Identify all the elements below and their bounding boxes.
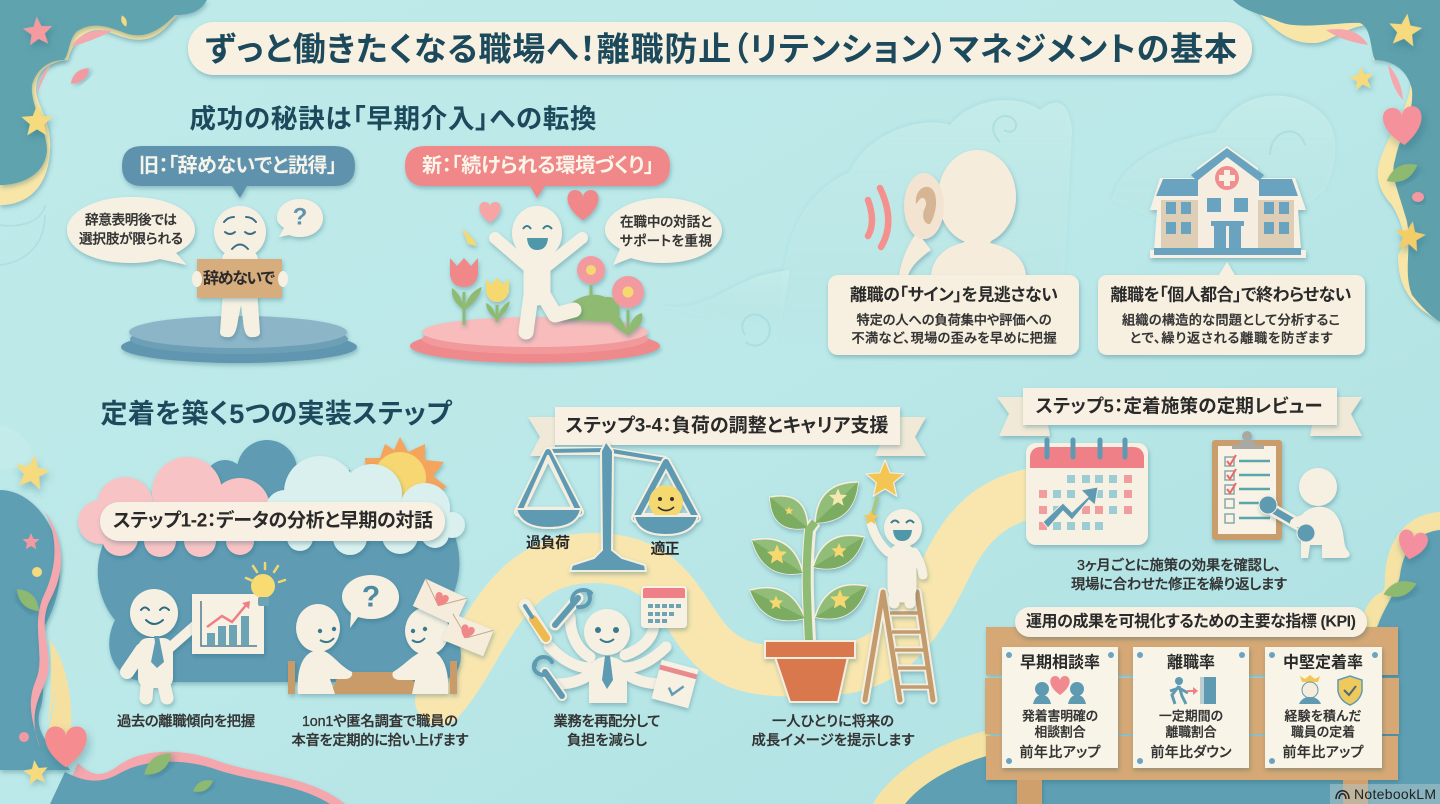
- caption: quarterly review: 現場に合わせた修正を繰り返します: [1071, 576, 1287, 593]
- icon: question bubble: ?: [362, 580, 380, 614]
- KPI card: turnover: 一定期間の: [1159, 708, 1223, 724]
- speech bubble right: サポートを重視: [620, 234, 712, 248]
- question bubble: [277, 199, 323, 237]
- platform blue: [121, 316, 357, 363]
- caption: future growth: 一人ひとりに将来の: [772, 713, 894, 730]
- icon: light bulb: [246, 563, 285, 606]
- question bubble: ?: [293, 204, 307, 230]
- decoration: lower left corner: [0, 425, 345, 804]
- caption: 1on1: 本音を定期的に拾い上げます: [292, 732, 469, 749]
- KPI card: early consultation: [1002, 647, 1118, 768]
- new pill text: 新：「続けられる環境づくり」: [422, 154, 654, 177]
- KPI card: mid-career retention: 経験を積んだ: [1284, 708, 1362, 724]
- KPI card: early consultation: 前年比アップ: [1020, 744, 1101, 760]
- KPI card: early consultation: 相談割合: [1034, 724, 1086, 740]
- icon: multi-armed figure: [549, 609, 666, 703]
- KPI title text: 運用の成果を可視化するための主要な指標 (KPI): [1026, 612, 1356, 630]
- icon: pink heart lower left: [45, 726, 87, 767]
- icon: chart board: [192, 594, 264, 654]
- speech bubble right: 在職中の対話と: [620, 214, 712, 230]
- icon: pink dot lower: [19, 732, 29, 742]
- heading: 5 steps: 定着を築く5つの実装ステップ: [100, 399, 453, 429]
- old pill: [122, 146, 355, 198]
- board posts and planks: [985, 627, 1399, 804]
- sign with text: [192, 259, 288, 298]
- caption: quarterly review: 3ヶ月ごとに施策の効果を確認し、: [1077, 556, 1281, 574]
- icon: pink heart lower right: [1395, 528, 1429, 562]
- icon: yellow star bottom left: [22, 758, 50, 785]
- ribbon banner: [997, 388, 1362, 436]
- icon: yellow star top right 1: [1387, 11, 1424, 47]
- watermark: NotebookLM: [1330, 784, 1440, 804]
- KPI card: mid-career retention: 中堅定着率: [1283, 652, 1363, 672]
- panel: new approach: [405, 146, 722, 363]
- caption: past trends: 過去の離職傾向を把握: [117, 713, 255, 730]
- icon: 1on1 conversation: [288, 604, 457, 694]
- icon: calendar with arrow: [1026, 440, 1148, 545]
- title: [188, 22, 1252, 75]
- icon: green leaf lower right: [1381, 577, 1419, 601]
- icon: presenter: [127, 589, 198, 698]
- ribbon banner: ステップ3-4：負荷の調整とキャリア支援: [566, 414, 888, 436]
- KPI card: turnover: 前年比ダウン: [1150, 744, 1232, 760]
- card body line 2: とで、繰り返される離職を防ぎます: [1130, 330, 1333, 346]
- icon: pink star lower left: [22, 533, 40, 549]
- icon: question bubble: [342, 575, 399, 628]
- card heading: 離職の「サイン」を見逃さない: [850, 286, 1058, 304]
- label: appropriate: 適正: [650, 540, 680, 558]
- icon: yellow petal: [120, 15, 128, 27]
- decoration: lower right corner: [873, 512, 1440, 804]
- icon: yellow dot: [32, 567, 42, 577]
- banner pill: [100, 502, 445, 541]
- KPI card: mid-career retention: 前年比アップ: [1282, 744, 1364, 760]
- icon: calendar in hand: [641, 586, 687, 628]
- speech bubble left: [67, 197, 195, 265]
- hearts and butterfly: [462, 190, 598, 246]
- decorative cloud: top right: [0, 96, 1335, 360]
- panel: step 5: [997, 388, 1362, 593]
- icon: yellow star lower left: [13, 452, 52, 490]
- KPI card: early consultation: 発着害明確の: [1022, 708, 1098, 724]
- new pill: [405, 146, 670, 198]
- icon: listening figure: [899, 150, 1026, 275]
- icon: pink star top left: [22, 15, 54, 46]
- ribbon banner: ステップ5：定着施策の定期レビュー: [1036, 396, 1322, 416]
- speech bubble right: [605, 198, 722, 265]
- card body line 2: 不満など、現場の歪みを早めに把握: [852, 330, 1056, 346]
- KPI card: mid-career retention: [1265, 647, 1382, 768]
- sign with text: 辞めないで: [203, 270, 275, 288]
- old pill text: 旧：「辞めないでと説得」: [139, 154, 337, 177]
- KPI card: turnover: [1133, 647, 1249, 768]
- icon: kneeling figure with wrench: [1259, 468, 1350, 558]
- watermark: NotebookLM: NotebookLM: [1354, 786, 1436, 802]
- flowers and bush: [450, 256, 644, 335]
- caption: redistribute: 業務を再配分して: [554, 713, 660, 730]
- icon: yellow star right lower: [1393, 219, 1428, 252]
- KPI card: turnover: 離職率: [1167, 654, 1215, 672]
- icon: yellow star top right 2: [1349, 65, 1375, 91]
- KPI card: turnover: 離職割合: [1166, 724, 1217, 740]
- icon: pink dot: [1412, 192, 1424, 202]
- panel: steps 3-4: [516, 407, 933, 749]
- heading: early intervention: 成功の秘訣は「早期介入」への転換: [190, 104, 596, 134]
- icon: tools: [525, 590, 591, 696]
- speech bubble left: 辞意表明後では: [85, 212, 177, 228]
- icon: checked calendar: [651, 660, 699, 708]
- panel: do not miss the signs: [828, 150, 1079, 355]
- card: signs: [828, 275, 1079, 355]
- caption: future growth: 成長イメージを提示します: [752, 732, 915, 749]
- icon: plant with stars: [750, 482, 867, 642]
- ribbon banner: [528, 407, 926, 456]
- panel: KPI board: [985, 607, 1399, 804]
- panel: steps 1-2: [78, 437, 494, 749]
- icon: pink petal: [68, 64, 92, 88]
- decoration: top right corner: [1233, 0, 1440, 322]
- label: overload: 過負荷: [526, 534, 570, 552]
- KPI title pill: [1015, 607, 1367, 637]
- KPI card: early consultation: 早期相談率: [1020, 654, 1100, 672]
- KPI card: mid-career retention: 職員の定着: [1291, 724, 1355, 740]
- icon: envelopes: [413, 579, 494, 656]
- icon: green leaf bottom 1: [140, 748, 176, 780]
- caption: 1on1: 1on1や匿名調査で職員の: [302, 713, 458, 730]
- happy figure: [495, 206, 582, 332]
- icon: clipboard: [1212, 431, 1282, 540]
- speech bubble left: 選択肢が限られる: [79, 230, 183, 246]
- icon: balance scale: [516, 441, 698, 571]
- panel: not personal reasons: [1098, 146, 1365, 355]
- title pill: [188, 22, 1252, 75]
- caption: 1on1: [292, 713, 469, 749]
- banner text: ステップ1-2：データの分析と早期の対話: [113, 508, 433, 532]
- icon: flower pot: [765, 641, 855, 702]
- panel: old approach: [67, 146, 357, 363]
- decoration: top left corner: [0, 0, 207, 205]
- card heading: 離職を「個人都合」で終わらせない: [1110, 286, 1352, 304]
- caption: redistribute: 負担を減らし: [567, 732, 647, 749]
- road: yellow winding path: [440, 490, 1060, 700]
- icon: green leaf bottom 2: [191, 776, 215, 796]
- caption: future growth: [752, 713, 915, 749]
- icon: green leaf left: [12, 584, 44, 616]
- card body line 1: 組織の構造的な問題として分析するこ: [1122, 312, 1340, 328]
- caption: redistribute: [554, 713, 660, 749]
- icon: sound waves: [868, 188, 888, 247]
- caption: quarterly review: [1071, 556, 1287, 593]
- platform pink: [410, 317, 660, 363]
- card body line 1: 特定の人への負荷集中や評価への: [856, 312, 1052, 328]
- icon: star reaching figure: [863, 460, 923, 603]
- icon: yellow star top left: [21, 106, 53, 135]
- card: structural: [1098, 262, 1365, 355]
- icon: green leaf right: [1383, 158, 1421, 188]
- icon: pink heart right: [1382, 105, 1424, 147]
- clouds and sun: [78, 437, 465, 682]
- icon: hospital: [1150, 146, 1306, 258]
- icon: ladder: [865, 592, 933, 700]
- title text: ずっと働きたくなる職場へ！離職防止（リテンション）マネジメントの基本: [205, 30, 1237, 68]
- sad figure: [214, 206, 266, 337]
